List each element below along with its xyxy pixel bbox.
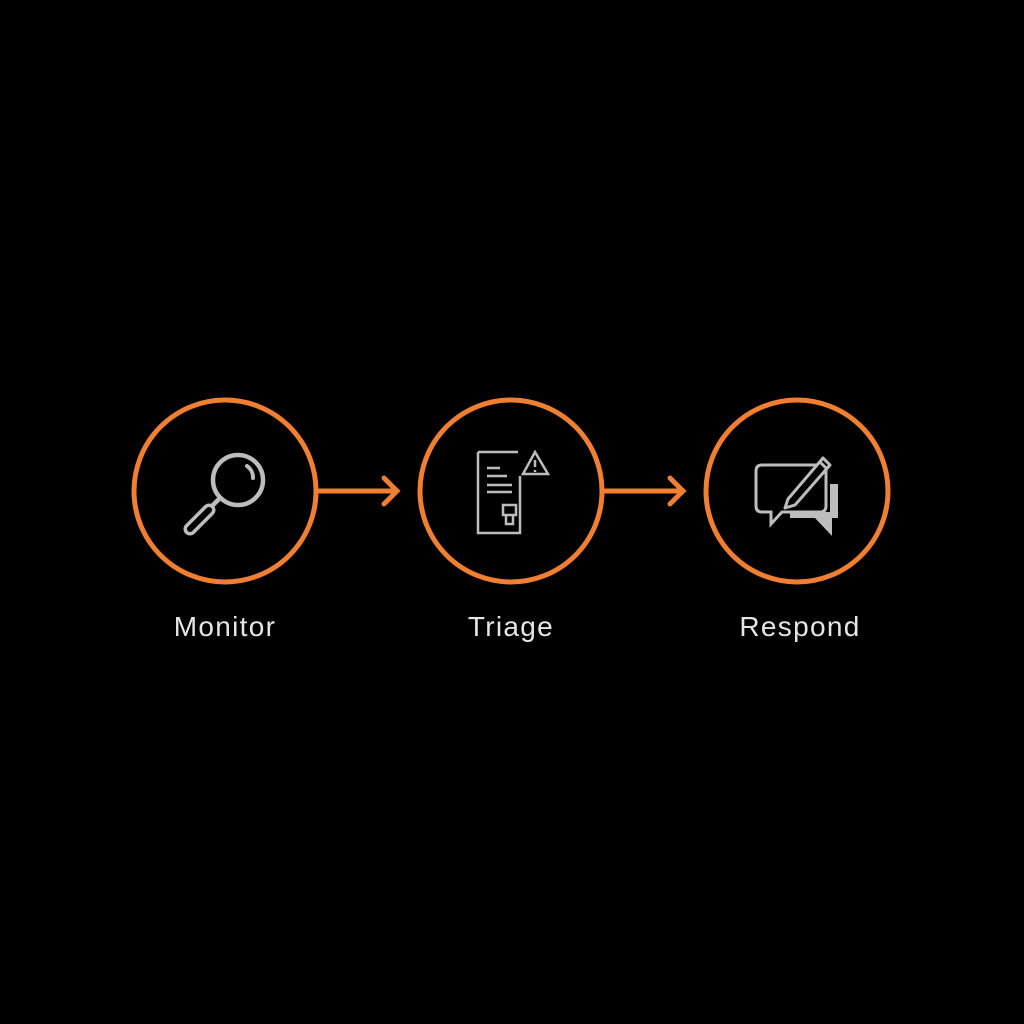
step circle: triage: [420, 400, 602, 582]
icon: magnifier: [190, 455, 263, 529]
arrow 2: [604, 478, 683, 504]
label: Monitor: Monitor: [174, 611, 276, 642]
step circle: respond: [706, 400, 888, 582]
step circle: monitor: [134, 400, 316, 582]
label: Triage: Triage: [468, 611, 554, 642]
label: Respond: Respond: [739, 611, 861, 642]
icon: document with warning: [478, 452, 548, 533]
icon: chat bubbles with pen: [756, 458, 838, 536]
arrow 1: [318, 478, 397, 504]
